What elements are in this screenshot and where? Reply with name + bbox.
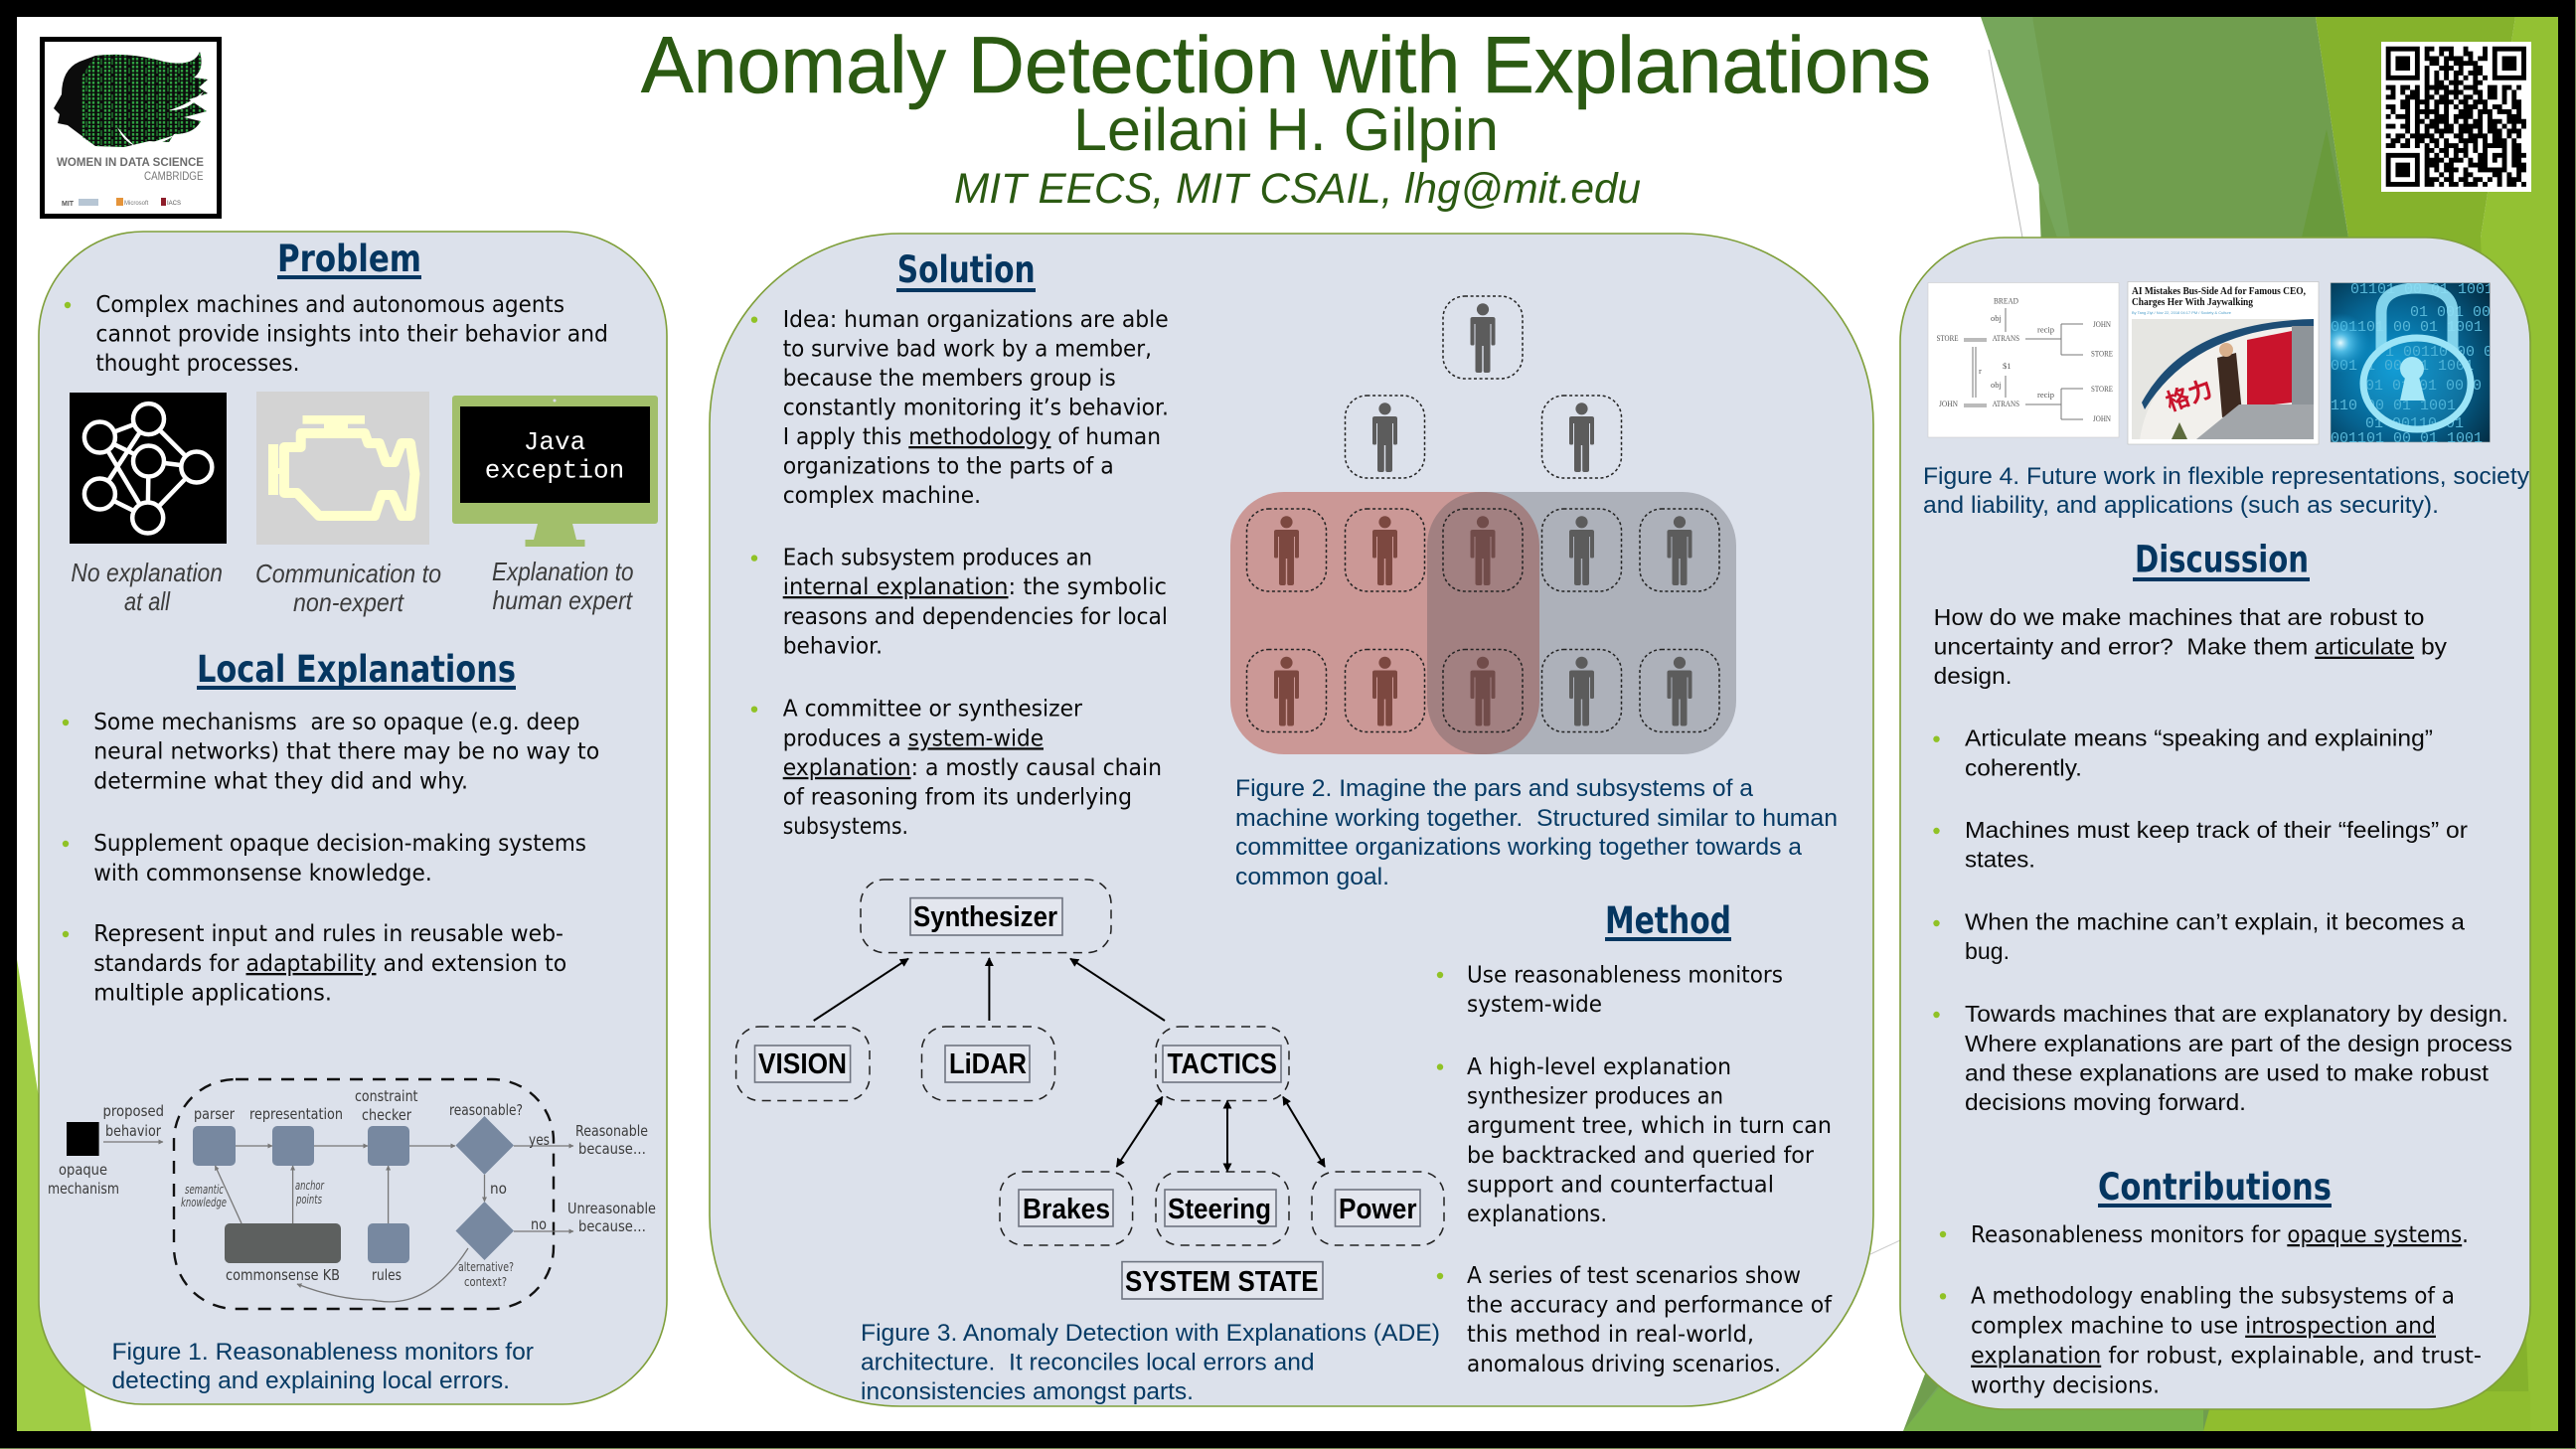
text block: method bullets: system-wide xyxy=(1467,992,1602,1018)
caption: figure 3: Figure 3. Anomaly Detection with Explanations (ADE) xyxy=(861,1320,1440,1347)
heading: Local Explanations: Local Explanations xyxy=(197,648,516,691)
title block xyxy=(641,21,1931,213)
caption: figure 2: machine working together. Structured similar to human xyxy=(1235,805,1838,832)
text block: solution bullets: behavior. xyxy=(783,634,883,660)
text block: discussion: bug. xyxy=(1965,938,2010,964)
text block: solution bullets: of reasoning from its underlying xyxy=(783,785,1132,811)
caption: figure 3 xyxy=(861,1320,1440,1405)
caption: communication to non-expert xyxy=(255,559,441,617)
chart: figure 1 reasonableness monitor diagram: knowledge xyxy=(181,1195,227,1209)
caption: no explanation: No explanation xyxy=(71,558,223,587)
text block: local explanations bullets: neural networks) that there may be no way to xyxy=(93,739,599,765)
image: digital padlock on binary background xyxy=(2331,281,2494,447)
caption: figure 1: detecting and explaining local errors. xyxy=(111,1368,510,1394)
text block: discussion: and these explanations are used to make robust xyxy=(1965,1060,2490,1086)
caption: figure 1 xyxy=(111,1339,534,1394)
logo: Women in Data Science Cambridge: CAMBRIDGE xyxy=(144,171,204,183)
text block: solution bullets: organizations to the parts of a xyxy=(783,454,1114,480)
image: news clipping AI mistakes bus-side ad: 格力 xyxy=(2163,376,2216,417)
text block: problem statement: cannot provide insights into their behavior and xyxy=(95,322,608,348)
image: conceptual dependency schema: STORE xyxy=(2091,349,2113,359)
text block: local explanations bullets: Supplement opaque decision-making systems xyxy=(93,831,586,857)
panel: future work, discussion and contributions xyxy=(1900,238,2530,1409)
text block: method bullets: support and counterfactual xyxy=(1467,1172,1774,1198)
text block: local explanations bullets: Represent input and rules in reusable web- xyxy=(93,921,564,947)
text block: solution bullets: produces a system-wide xyxy=(783,725,1044,751)
caption: communication to non-expert: Communication to xyxy=(255,559,441,588)
chart: figure 1 reasonableness monitor diagram: commonsense KB xyxy=(226,1266,340,1284)
text block: discussion: Towards machines that are explanatory by design. xyxy=(1965,1001,2508,1027)
caption: no explanation: at all xyxy=(124,586,171,616)
text block: local explanations bullets: Some mechanisms are so opaque (e.g. deep xyxy=(93,710,579,735)
caption: figure 1: Figure 1. Reasonableness monitors for xyxy=(111,1339,534,1366)
text block: local explanations bullets: with commonsense knowledge. xyxy=(93,861,432,886)
chart: figure 1 reasonableness monitor diagram: checker xyxy=(362,1106,412,1124)
chart: figure 1 reasonableness monitor diagram: alternative? xyxy=(458,1259,514,1274)
text block: solution bullets: explanation: a mostly causal chain xyxy=(783,755,1162,781)
chart: figure 1 reasonableness monitor diagram: because… xyxy=(578,1217,646,1235)
image: digital padlock on binary background: 1 00110 00 0 xyxy=(2385,344,2493,361)
icon: check engine light xyxy=(256,392,429,545)
image: conceptual dependency schema: r xyxy=(1979,366,1982,376)
chart: figure 1 reasonableness monitor diagram: anchor xyxy=(295,1178,325,1193)
text block: local explanations bullets: multiple applications. xyxy=(93,981,332,1007)
caption: explanation to human expert: human expert xyxy=(493,585,634,615)
chart: figure 3 ADE architecture: VISION xyxy=(758,1048,847,1080)
image: news clipping AI mistakes bus-side ad: By Tang Ziyi / Nov 22, 2018 04:17 PM / Society & Culture xyxy=(2132,310,2232,315)
chart: figure 1 reasonableness monitor diagram: proposed xyxy=(103,1102,164,1120)
chart: figure 1 reasonableness monitor diagram: mechanism xyxy=(48,1180,119,1198)
text block: discussion: design. xyxy=(1934,663,2012,689)
text block: local explanations bullets: determine what they did and why. xyxy=(93,768,468,794)
caption: explanation to human expert: Explanation to xyxy=(492,557,634,586)
text block: problem statement: Complex machines and autonomous agents xyxy=(95,292,564,318)
text block: solution bullets: I apply this methodology of human xyxy=(783,424,1161,450)
image: conceptual dependency schema: STORE xyxy=(1936,333,1958,343)
text block: method bullets: the accuracy and performance of xyxy=(1467,1293,1833,1319)
image: conceptual dependency schema: recip xyxy=(2037,324,2054,334)
chart: figure 1 reasonableness monitor diagram: context? xyxy=(464,1274,507,1289)
text block: solution bullets: Each subsystem produces an xyxy=(783,546,1092,571)
text block: solution bullets: constantly monitoring it’s behavior. xyxy=(783,396,1169,421)
image: conceptual dependency schema: obj xyxy=(1991,313,2002,323)
image: digital padlock on binary background: 01 001 00 xyxy=(2410,304,2491,321)
icon: head silhouette with matrix hair xyxy=(54,50,208,149)
logo text: WOMEN IN DATA SCIENCE xyxy=(57,157,204,169)
heading: Method: Method xyxy=(1605,899,1731,942)
text block: method bullets: argument tree, which in turn can xyxy=(1467,1113,1832,1139)
image: conceptual dependency schema: $1 xyxy=(2003,361,2012,371)
text block: discussion: Where explanations are part of the design process xyxy=(1965,1031,2512,1056)
text block: solution bullets: subsystems. xyxy=(783,814,908,840)
heading: Contributions: Contributions xyxy=(2098,1166,2332,1208)
icon: monitor showing Java exception: exception xyxy=(485,455,624,485)
image: digital padlock on binary background: 01 00110 01 xyxy=(2365,415,2464,432)
chart: figure 1 reasonableness monitor diagram: Unreasonable xyxy=(567,1200,656,1217)
background facet: lower left green triangle xyxy=(17,959,91,1431)
text block: solution bullets: because the members group is xyxy=(783,366,1116,392)
sponsor logos xyxy=(62,198,181,208)
text block: method bullets: this method in real-world, xyxy=(1467,1322,1754,1348)
text block: method bullets: anomalous driving scenarios. xyxy=(1467,1352,1781,1377)
heading: Discussion: Discussion xyxy=(2135,539,2309,581)
chart: figure 1 reasonableness monitor diagram: semantic xyxy=(185,1182,224,1197)
caption: figure 2: committee organizations working together towards a xyxy=(1235,834,1803,861)
image: news clipping AI mistakes bus-side ad: AI Mistakes Bus-Side Ad for Famous CEO, xyxy=(2132,286,2306,297)
text block: contributions: complex machine to use introspection and xyxy=(1971,1314,2436,1340)
text block: contributions: explanation for robust, explainable, and trust- xyxy=(1971,1344,2482,1369)
heading: Problem: Problem xyxy=(277,238,421,280)
text block: solution bullets: complex machine. xyxy=(783,483,981,509)
caption: explanation to human expert xyxy=(492,557,634,615)
QR code xyxy=(2381,42,2531,192)
red subsystem group xyxy=(1230,492,1539,754)
caption: figure 3: inconsistencies amongst parts. xyxy=(861,1378,1194,1405)
text block: problem statement: thought processes. xyxy=(95,351,299,377)
text block: contributions xyxy=(1940,1222,2482,1399)
image: digital padlock on binary background: 001101 00 01 1001 xyxy=(2331,319,2483,336)
chart: figure 3 ADE architecture: TACTICS xyxy=(1167,1048,1277,1080)
text block: solution bullets: reasons and dependencies for local xyxy=(783,604,1168,630)
text block: contributions: A methodology enabling the subsystems of a xyxy=(1971,1284,2455,1310)
text block: local explanations bullets: standards for adaptability and extension to xyxy=(93,951,566,977)
text block: solution bullets: A committee or synthesizer xyxy=(783,697,1083,723)
author: Leilani H. Gilpin xyxy=(1073,96,1499,163)
image: conceptual dependency schema: JOHN xyxy=(1939,399,1958,408)
text block: discussion: states. xyxy=(1965,847,2035,873)
image: conceptual dependency schema: obj xyxy=(1991,380,2002,390)
gray subsystem group xyxy=(1427,492,1736,754)
text block: problem statement xyxy=(65,292,608,377)
icon: monitor showing Java exception xyxy=(452,396,658,547)
text block: method bullets: be backtracked and queried for xyxy=(1467,1143,1815,1169)
panel: problem and local explanations xyxy=(39,232,667,1404)
image: digital padlock on binary background: 01 01 01 00 0 xyxy=(2365,378,2482,395)
text block: discussion: When the machine can’t explain, it becomes a xyxy=(1965,909,2465,935)
text block: solution bullets: Idea: human organizations are able xyxy=(783,307,1169,333)
logo: Women in Data Science Cambridge xyxy=(42,40,219,217)
image: conceptual dependency schema: recip xyxy=(2037,390,2054,400)
caption: figure 2: common goal. xyxy=(1235,864,1389,890)
text block: discussion: How do we make machines that are robust to xyxy=(1934,604,2425,630)
text block: method bullets: A series of test scenarios show xyxy=(1467,1263,1801,1289)
chart: figure 3 ADE architecture: Power xyxy=(1339,1194,1417,1225)
chart: figure 1 reasonableness monitor diagram xyxy=(48,1079,656,1309)
image: digital padlock on binary background: 001 1 00 01 1001 xyxy=(2331,358,2474,375)
chart: figure 1 reasonableness monitor diagram: parser xyxy=(194,1105,236,1123)
image: news clipping AI mistakes bus-side ad xyxy=(2128,282,2319,444)
text block: method bullets: A high-level explanation xyxy=(1467,1054,1731,1080)
text block: discussion: coherently. xyxy=(1965,755,2082,781)
chart: figure 1 reasonableness monitor diagram: Reasonable xyxy=(575,1122,648,1140)
image: conceptual dependency schema: STORE xyxy=(2091,384,2113,394)
text block: method bullets xyxy=(1437,962,1833,1377)
chart: figure 1 reasonableness monitor diagram: representation xyxy=(249,1105,343,1123)
affiliation: MIT EECS, MIT CSAIL, lhg@mit.edu xyxy=(954,165,1641,213)
text block: discussion xyxy=(1933,604,2512,1115)
chart: figure 3 ADE architecture: Brakes xyxy=(1023,1194,1110,1225)
image: digital padlock on binary background: 110 00 01 1001 xyxy=(2331,398,2456,414)
chart: figure 1 reasonableness monitor diagram: points xyxy=(295,1192,322,1207)
chart: figure 3 ADE architecture: Steering xyxy=(1168,1194,1271,1225)
image: digital padlock on binary background: 01101 00 01 1001 xyxy=(2350,281,2494,298)
text block: discussion: Articulate means “speaking and explaining” xyxy=(1965,725,2433,751)
text block: method bullets: explanations. xyxy=(1467,1202,1607,1227)
image: conceptual dependency schema: JOHN xyxy=(2093,319,2111,329)
chart: figure 1 reasonableness monitor diagram: no xyxy=(490,1180,507,1198)
text block: contributions: Reasonableness monitors for opaque systems. xyxy=(1971,1222,2469,1248)
image: digital padlock on binary background: 001101 00 01 1001 xyxy=(2331,430,2483,447)
image: conceptual dependency schema: JOHN xyxy=(2093,413,2111,423)
chart: figure 1 reasonableness monitor diagram: yes xyxy=(529,1131,550,1149)
icon: neural network xyxy=(70,393,227,544)
chart: figure 1 reasonableness monitor diagram: no xyxy=(531,1215,547,1233)
icon: monitor showing Java exception: Java xyxy=(524,427,585,457)
chart: figure 2 committee of people xyxy=(1230,296,1736,754)
chart: figure 3 ADE architecture: LiDAR xyxy=(949,1048,1027,1080)
caption: figure 4: and liability, and applications (such as security). xyxy=(1923,492,2439,519)
sponsor logos: Microsoft xyxy=(124,201,149,207)
caption: figure 2: Figure 2. Imagine the pars and subsystems of a xyxy=(1235,775,1754,802)
text block: discussion: decisions moving forward. xyxy=(1965,1089,2246,1115)
chart: figure 1 reasonableness monitor diagram: opaque xyxy=(59,1161,107,1179)
image: news clipping AI mistakes bus-side ad: Charges Her With Jaywalking xyxy=(2132,297,2254,308)
sponsor logos: MIT xyxy=(62,201,75,208)
text block: solution bullets xyxy=(751,307,1169,840)
panel: solution and method xyxy=(710,234,1873,1406)
chart: figure 1 reasonableness monitor diagram: because… xyxy=(578,1140,646,1158)
image: conceptual dependency schema: ATRANS xyxy=(1993,399,2019,408)
sponsor logos: IACS xyxy=(167,201,181,207)
image: conceptual dependency schema: ATRANS xyxy=(1993,333,2019,343)
image: conceptual dependency schema xyxy=(1928,282,2119,437)
chart: figure 1 reasonableness monitor diagram: rules xyxy=(372,1266,402,1284)
text block: method bullets: Use reasonableness monitors xyxy=(1467,962,1783,988)
caption: figure 2 xyxy=(1235,775,1838,890)
text block: discussion: Machines must keep track of their “feelings” or xyxy=(1965,817,2468,843)
caption: no explanation xyxy=(71,558,223,616)
text block: contributions: worthy decisions. xyxy=(1971,1373,2160,1399)
chart: figure 3 ADE architecture: SYSTEM STATE xyxy=(1125,1266,1318,1298)
white hair wisps xyxy=(117,91,204,146)
text block: solution bullets: to survive bad work by a member, xyxy=(783,336,1152,362)
text block: method bullets: synthesizer produces an xyxy=(1467,1084,1723,1110)
text block: solution bullets: internal explanation: the symbolic xyxy=(783,574,1167,600)
main title: Anomaly Detection with Explanations xyxy=(641,21,1931,110)
text block: discussion: uncertainty and error? Make them articulate by xyxy=(1934,634,2448,660)
heading: Solution: Solution xyxy=(897,248,1036,291)
text block: local explanations bullets xyxy=(63,710,599,1007)
caption: communication to non-expert: non-expert xyxy=(293,587,405,617)
chart: figure 1 reasonableness monitor diagram: constraint xyxy=(355,1087,417,1105)
chart: figure 1 reasonableness monitor diagram: reasonable? xyxy=(449,1101,523,1119)
caption: figure 3: architecture. It reconciles local errors and xyxy=(861,1350,1315,1376)
caption: figure 4: Figure 4. Future work in flexible representations, society xyxy=(1923,463,2529,490)
chart: figure 3 ADE architecture: Synthesizer xyxy=(913,901,1057,933)
image: conceptual dependency schema: BREAD xyxy=(1994,296,2018,306)
chart: figure 1 reasonableness monitor diagram: behavior xyxy=(105,1122,162,1140)
chart: figure 3 ADE architecture xyxy=(736,880,1444,1299)
caption: figure 4 xyxy=(1923,463,2529,519)
